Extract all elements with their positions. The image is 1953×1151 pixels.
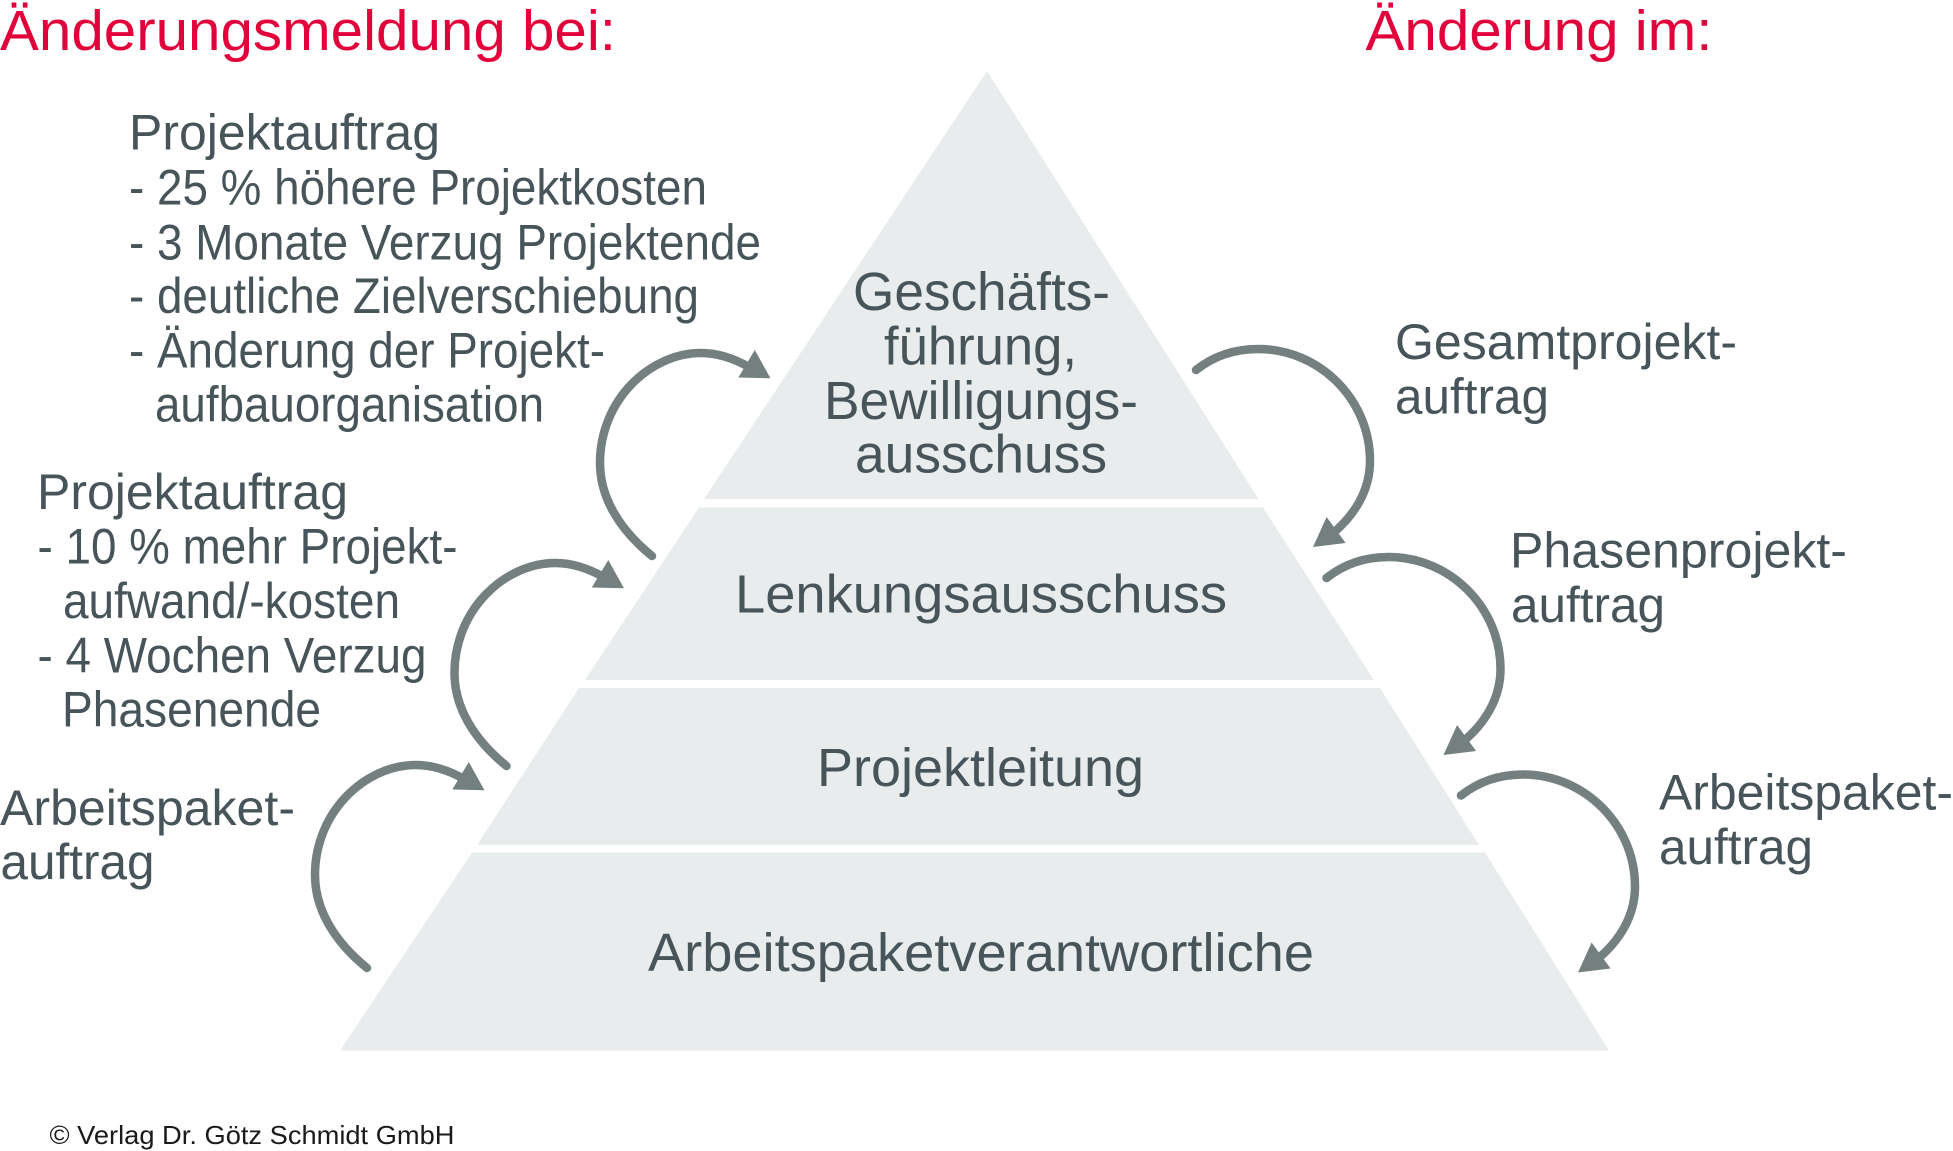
text block: Projektauftrag top: Projektauftrag (129, 104, 440, 160)
tier: Projektleitung (477, 688, 1479, 845)
tier: Geschäftsführung (704, 71, 1258, 499)
text block: Projektauftrag top (129, 104, 761, 432)
tier: Arbeitspaketverantwortliche: Arbeitspaketverantwortliche (648, 923, 1314, 983)
text block: Arbeitspaketauftrag left (0, 780, 295, 890)
text block: Phasenprojektauftrag: Phasenprojekt- (1510, 522, 1847, 578)
text block: Gesamtprojektauftrag (1395, 314, 1737, 424)
tier: Geschäftsführung: führung, (884, 316, 1077, 376)
text block: Projektauftrag top: - deutliche Zielverschiebung (129, 268, 699, 324)
text block: Projektauftrag top: - Änderung der Projekt- (129, 323, 605, 379)
text block: Projektauftrag top: - 25 % höhere Projektkosten (129, 160, 707, 216)
arrow: up to Geschäftsführung (600, 350, 770, 556)
arrow: down to Arbeitspaketverantwortliche (1461, 774, 1635, 972)
pyramid (340, 71, 1609, 1050)
arrow: down to Projektleitung (1326, 557, 1500, 755)
text block: Projektauftrag middle: Projektauftrag (37, 464, 348, 520)
tier: Geschäftsführung: ausschuss (855, 424, 1107, 484)
text block: Arbeitspaketauftrag left: Arbeitspaket- (0, 780, 295, 836)
text block: Projektauftrag top: aufbauorganisation (155, 376, 544, 432)
text block: Gesamtprojektauftrag: auftrag (1395, 368, 1549, 424)
text block: Arbeitspaketauftrag left: auftrag (0, 834, 154, 890)
text block: Projektauftrag middle: Phasenende (62, 681, 321, 737)
tier: Lenkungsausschuss: Lenkungsausschuss (735, 564, 1227, 624)
tier: Projektleitung: Projektleitung (817, 738, 1144, 798)
text block: Projektauftrag middle (37, 464, 458, 737)
text block: Phasenprojektauftrag (1510, 522, 1847, 633)
text block: Projektauftrag middle: aufwand/-kosten (63, 573, 400, 629)
arrow: down to Lenkungsausschuss (1196, 349, 1370, 547)
text block: Projektauftrag middle: - 10 % mehr Projekt- (38, 519, 458, 575)
text block: Arbeitspaketauftrag right: Arbeitspaket- (1659, 765, 1953, 821)
text block: Gesamtprojektauftrag: Gesamtprojekt- (1395, 314, 1737, 370)
text block: Projektauftrag top: - 3 Monate Verzug Projektende (129, 214, 761, 270)
tier: Geschäftsführung: Bewilligungs- (824, 371, 1138, 431)
copyright: © Verlag Dr. Götz Schmidt GmbH (50, 1120, 454, 1150)
text block: Projektauftrag middle: - 4 Wochen Verzug (38, 627, 426, 683)
arrow: up to Lenkungsausschuss (454, 560, 624, 766)
text block: Arbeitspaketauftrag right: auftrag (1659, 819, 1813, 875)
heading: Änderungsmeldung bei: Änderungsmeldung bei: (0, 0, 616, 63)
tier: Geschäftsführung: Geschäfts- (853, 262, 1110, 322)
text block: Arbeitspaketauftrag right (1659, 765, 1953, 875)
arrow: up to Projektleitung (315, 762, 484, 968)
tier: Arbeitspaketverantwortliche (340, 852, 1609, 1050)
text block: Phasenprojektauftrag: auftrag (1511, 577, 1665, 633)
heading: Änderung im: Änderung im: (1366, 0, 1712, 63)
tier: Lenkungsausschuss (585, 508, 1374, 680)
